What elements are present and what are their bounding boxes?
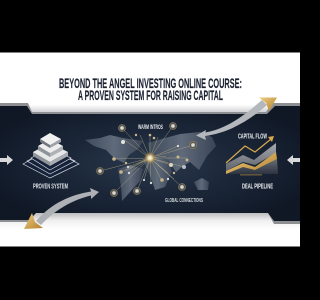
label: proven system: PROVEN SYSTEM: [33, 184, 68, 190]
arrow: curved bottom left to pyramid: [24, 188, 99, 229]
arrow: left entry: [0, 155, 13, 165]
arrow: curved top right to map: [196, 98, 277, 140]
dark central panel: [0, 103, 300, 224]
network connections: [100, 126, 193, 193]
chart: capital flow and deal pipeline: [226, 136, 278, 175]
label: global connections: GLOBAL CONNECTIONS: [165, 198, 203, 204]
label: warm intros: WARM INTROS: [138, 125, 163, 131]
continent: south america: [118, 165, 143, 201]
title: [59, 75, 242, 103]
continent: eurasia: [148, 132, 216, 172]
world map: [85, 132, 216, 201]
continent: africa: [143, 157, 172, 190]
network nodes: [96, 122, 197, 197]
continent: australia: [194, 178, 209, 190]
bottom white area: [0, 212, 300, 246]
icon: layered pyramid: [23, 133, 79, 178]
continent: north america: [85, 135, 143, 163]
top white area: [0, 52, 300, 114]
arrow: right entry: [287, 155, 300, 165]
label: capital flow: CAPITAL FLOW: [238, 134, 267, 140]
label: deal pipeline: DEAL PIPELINE: [242, 184, 273, 190]
